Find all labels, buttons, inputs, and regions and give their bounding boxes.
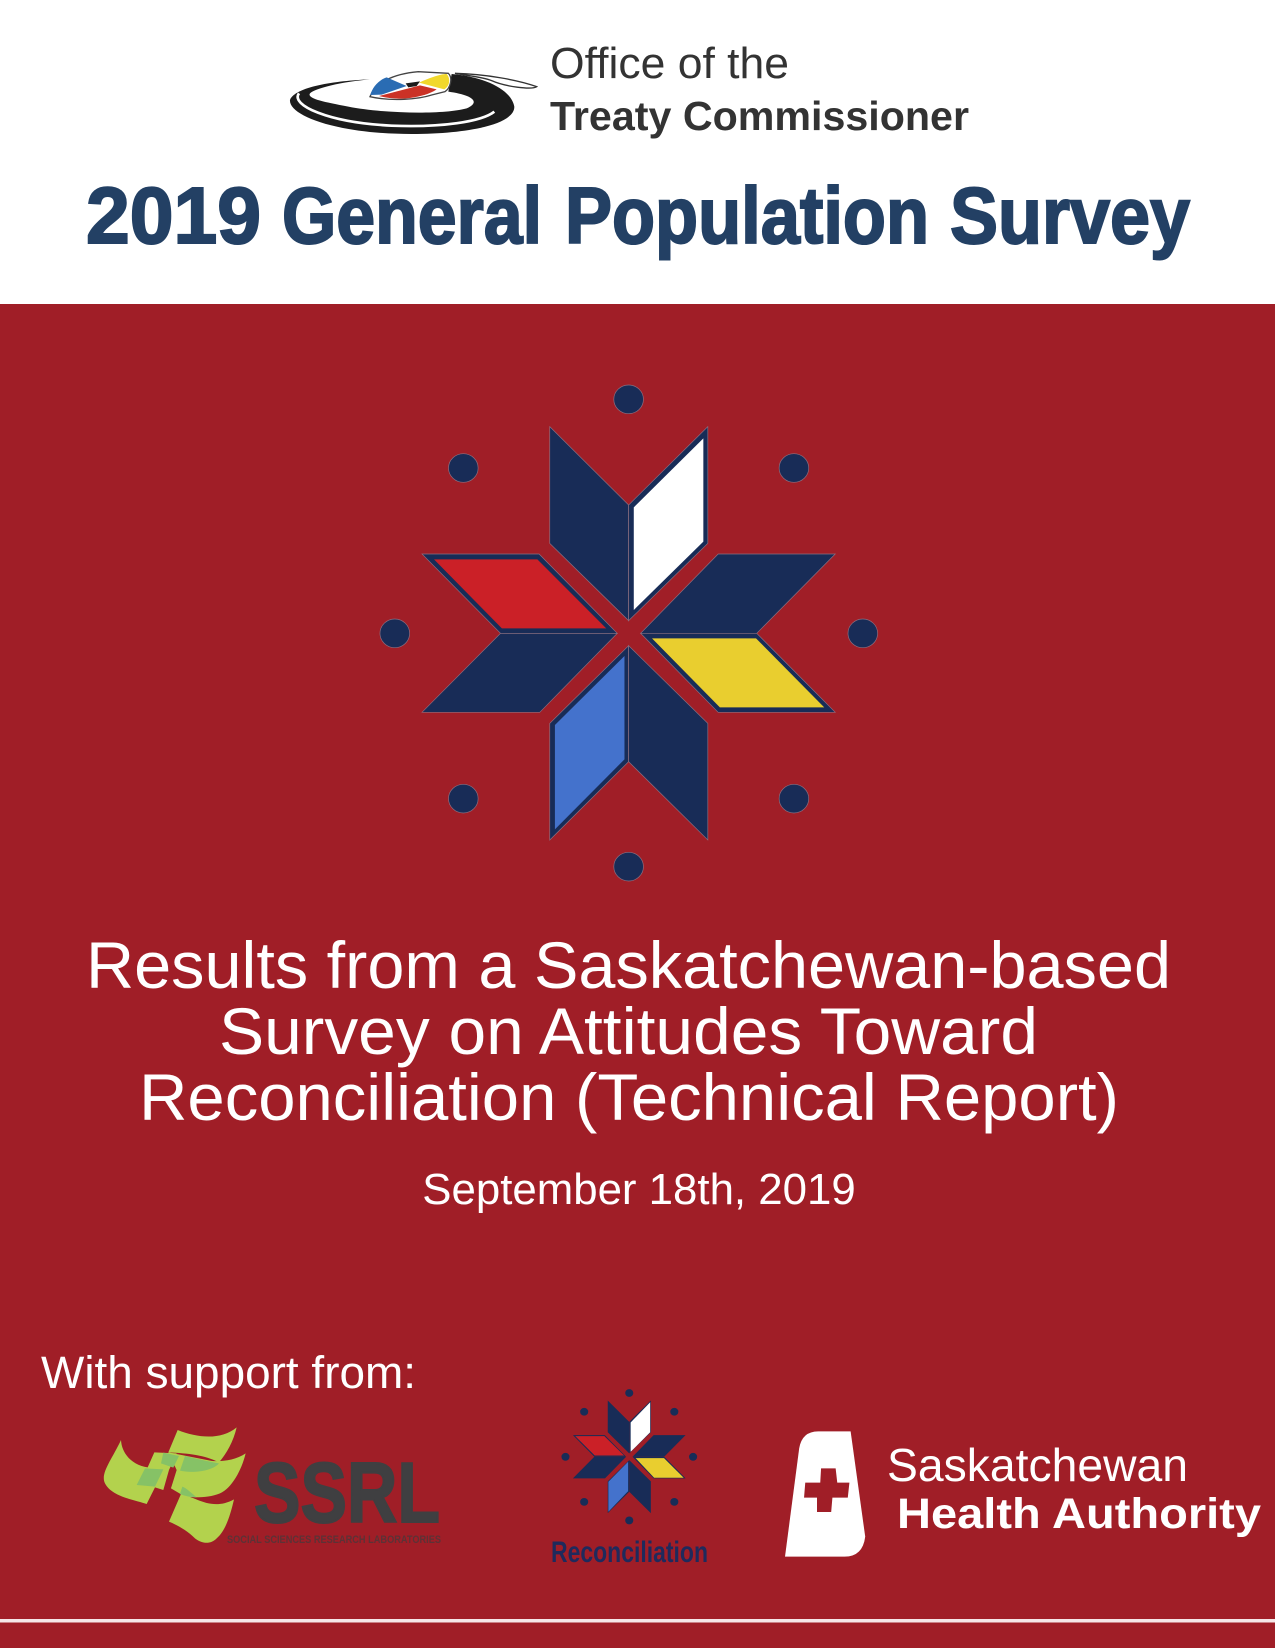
date: September 18th, 2019 <box>422 1165 856 1214</box>
subtitle text block: Results from a Saskatchewan-based <box>86 928 1171 1002</box>
title: Population <box>565 171 929 260</box>
subtitle text block: Reconciliation (Technical Report) <box>139 1060 1119 1134</box>
subtitle text block: Survey on Attitudes Toward <box>219 994 1038 1068</box>
icon: SSRL green leaves <box>104 1427 246 1543</box>
title: General <box>282 171 542 260</box>
title: 2019 <box>86 171 261 260</box>
logo: SSRL <box>104 1427 441 1546</box>
icon: white province shape with red cross <box>785 1431 865 1557</box>
logo text: Health Authority: Health Authority <box>897 1490 1261 1538</box>
logo text: SSRL: SSRL <box>254 1446 440 1541</box>
icon: small eight-point star with dots <box>561 1389 697 1524</box>
logo text: Office of the: Office of the <box>550 39 789 88</box>
logo text: Saskatchewan: Saskatchewan <box>887 1439 1188 1491</box>
heading: with support from: With support from: <box>41 1347 416 1398</box>
logo text: Reconciliation: Reconciliation <box>551 1536 708 1569</box>
logo: Reconciliation <box>551 1389 708 1569</box>
title <box>86 171 1190 260</box>
page background: white header <box>0 0 1275 304</box>
logo text: Treaty Commissioner: Treaty Commissioner <box>550 93 969 139</box>
title: Survey <box>950 171 1190 260</box>
logo text: Social Sciences Research Laboratories: SOCIAL SCIENCES RESEARCH LABORATORIES <box>227 1534 441 1546</box>
icon: swoosh and medicine wheel <box>290 72 537 134</box>
logo: Office of the Treaty Commissioner <box>290 39 969 139</box>
icon: large eight-point star with dots <box>380 385 878 881</box>
logo: Saskatchewan Health Authority <box>785 1431 1261 1557</box>
subtitle text block <box>86 928 1171 1134</box>
